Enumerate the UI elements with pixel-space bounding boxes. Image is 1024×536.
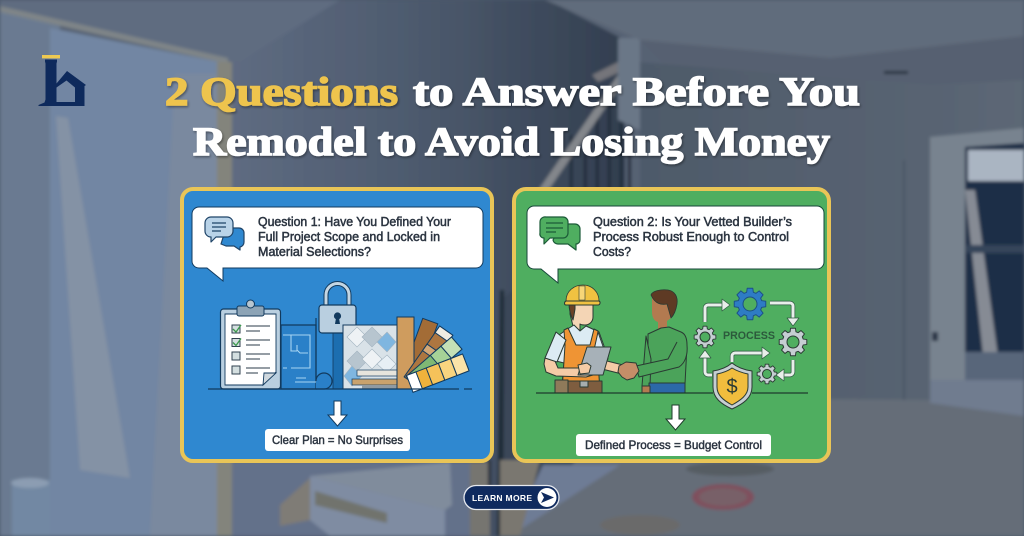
logo <box>38 55 86 106</box>
clipboard checklist <box>220 300 280 389</box>
question 2 text: Costs? <box>593 245 631 259</box>
ground line <box>536 392 808 394</box>
icon: chat bubbles <box>205 217 244 250</box>
learn more button <box>464 486 559 510</box>
panel: question 1 <box>182 189 829 510</box>
icon: chat bubbles <box>540 217 580 250</box>
question 1 text: Full Project Scope and Locked in <box>258 230 440 244</box>
caption: defined process: Defined Process = Budget Control <box>585 438 762 452</box>
speech bubble: question 1 <box>192 207 483 281</box>
question 1 text: Question 1: Have You Defined Your <box>258 215 451 229</box>
handshake <box>618 362 639 380</box>
illustration: builder handshake <box>544 285 807 409</box>
doorway <box>930 128 1024 385</box>
speech bubble: question 2 <box>527 206 824 283</box>
title: Remodel to Avoid Losing Money <box>193 119 830 164</box>
material and colour swatch fan <box>397 317 469 392</box>
title: 2 Questions <box>165 69 398 114</box>
arrows <box>705 303 793 375</box>
left wall <box>0 0 60 536</box>
blueprint <box>281 318 332 389</box>
question 1 text: Material Selections? <box>258 245 371 259</box>
caption: defined process <box>576 434 771 456</box>
process label: PROCESS <box>723 330 775 342</box>
builder <box>544 285 623 393</box>
title <box>165 69 860 164</box>
client <box>636 290 687 393</box>
padlock <box>319 284 356 389</box>
learn more button: LEARN MORE <box>472 493 532 503</box>
centre stair wall <box>225 0 625 536</box>
gears <box>694 288 807 384</box>
panel: question 2 <box>514 189 829 461</box>
tile sample <box>343 325 399 389</box>
caption: clear plan: Clear Plan = No Surprises <box>272 433 403 447</box>
ceiling and right wall <box>545 0 1024 60</box>
lower centre and stair box <box>232 462 470 536</box>
floor <box>500 397 1024 536</box>
stair railing and balusters <box>500 200 640 536</box>
question 2 text: Process Robust Enough to Control <box>593 230 789 244</box>
shield with dollar sign: $ <box>726 376 738 398</box>
caption: clear plan <box>265 429 410 451</box>
arrow down <box>328 401 347 426</box>
question 2 text: Question 2: Is Your Vetted Builder’s <box>593 215 792 229</box>
process loop <box>694 288 807 409</box>
title: to Answer Before You <box>413 69 860 114</box>
ground line <box>208 388 472 390</box>
illustration: planning materials <box>208 284 472 451</box>
arrow down <box>666 405 685 430</box>
